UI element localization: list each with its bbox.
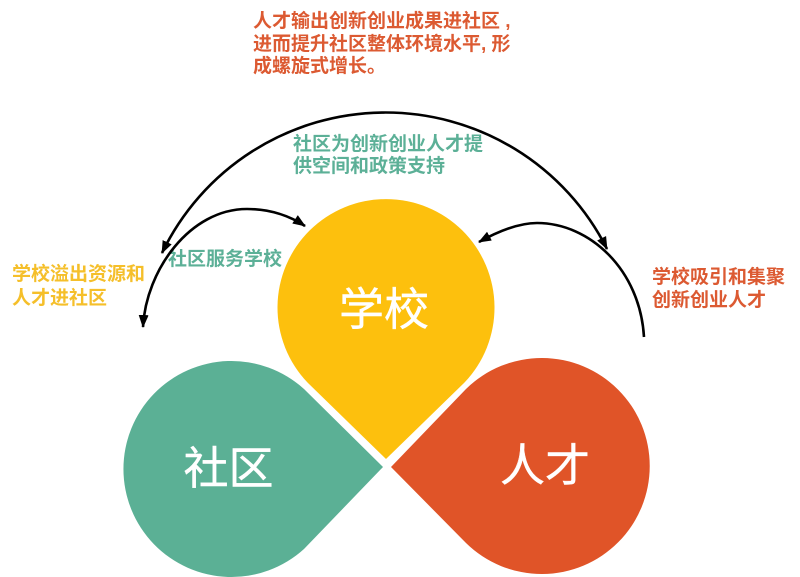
text: school resources overflow: 学校溢出资源和 (12, 262, 145, 285)
text: community serves school: 社区服务学校 (168, 247, 282, 270)
text: school resources overflow: 人才进社区 (12, 286, 107, 309)
teardrop: community (123, 361, 383, 577)
text: community provides space and policy (293, 132, 483, 177)
text: community provides space and policy: 供空间和政策支持 (293, 154, 445, 177)
top text: talent output: 人才输出创新创业成果进社区 , (253, 9, 511, 32)
text: school attracts talent: 创新创业人才 (652, 289, 766, 311)
text: community provides space and policy: 社区为创新创业人才提 (293, 132, 483, 155)
label: community: 社区 (183, 443, 274, 494)
top text: talent output: 成螺旋式增长。 (253, 54, 386, 77)
text: school attracts talent: 学校吸引和集聚 (652, 265, 785, 288)
label: talent: 人才 (500, 440, 590, 491)
arrow: talent to school arc (479, 223, 644, 337)
label: school: 学校 (339, 284, 429, 335)
text: school resources overflow (12, 262, 145, 309)
arrow: community-school arc (143, 209, 305, 327)
top text: talent output (253, 9, 511, 77)
text: school attracts talent (652, 265, 785, 311)
arrow: large arc community to talent (162, 113, 607, 253)
top text: talent output: 进而提升社区整体环境水平, 形 (253, 32, 511, 55)
teardrop: school (278, 199, 494, 459)
teardrop: talent (391, 358, 650, 574)
